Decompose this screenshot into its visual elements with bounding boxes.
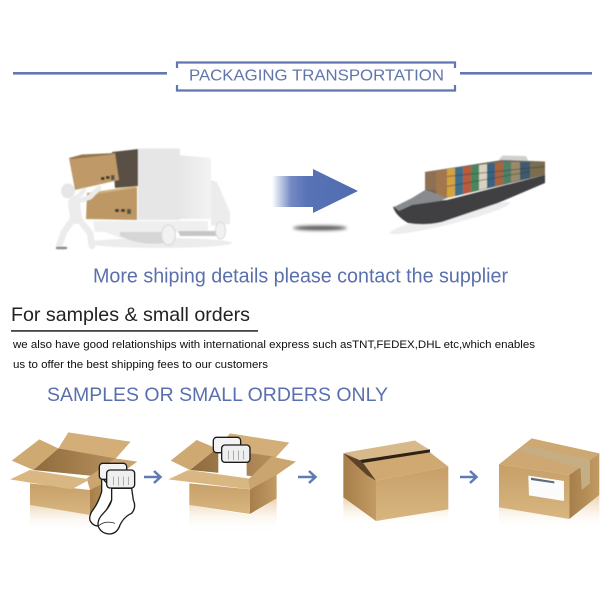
step 2: open box with socks inside bbox=[168, 433, 296, 532]
step 4: taped box with shipping label bbox=[499, 438, 599, 530]
upper cardboard box bbox=[69, 153, 119, 190]
truck body bbox=[93, 148, 230, 245]
packing tape bbox=[518, 446, 590, 490]
ship deck bbox=[394, 190, 447, 211]
arrow: step 1 to 2 bbox=[144, 471, 160, 483]
shipping label bbox=[528, 476, 564, 501]
heading: samples or small orders only: SAMPLES OR SMALL ORDERS ONLY bbox=[47, 384, 388, 406]
worker figure bbox=[57, 184, 99, 248]
ship superstructure bbox=[498, 156, 529, 164]
arrow: truck to ship bbox=[272, 169, 358, 230]
heading: packaging transportation: PACKAGING TRANSPORTATION bbox=[189, 68, 444, 84]
arrow: step 3 to 4 bbox=[460, 471, 476, 483]
body text: express shipping description: us to offer the best shipping fees to our customers bbox=[13, 359, 268, 371]
illustration: delivery truck with worker loading boxes bbox=[57, 148, 232, 248]
step 1: open box with socks beside it bbox=[10, 432, 137, 534]
truck cargo interior bbox=[112, 149, 138, 188]
body text: express shipping description bbox=[12, 339, 535, 371]
containers bbox=[425, 160, 545, 198]
socks bbox=[90, 463, 135, 534]
heading: packaging transportation bbox=[13, 62, 592, 90]
body text: express shipping description: we also have good relationships with international express such asTNT,FEDEX,DHL etc,which enables bbox=[12, 339, 535, 351]
section heading: for samples and small orders: For samples & small orders bbox=[11, 304, 250, 326]
socks bbox=[213, 437, 250, 477]
ship hull bbox=[393, 175, 545, 224]
subtitle: contact the supplier: More shiping details please contact the supplier bbox=[93, 266, 508, 288]
step 3: closed box with open seam bbox=[343, 441, 448, 525]
arrow: step 2 to 3 bbox=[298, 471, 316, 483]
illustration: container ship bbox=[388, 156, 545, 239]
lower cardboard box bbox=[86, 186, 137, 220]
